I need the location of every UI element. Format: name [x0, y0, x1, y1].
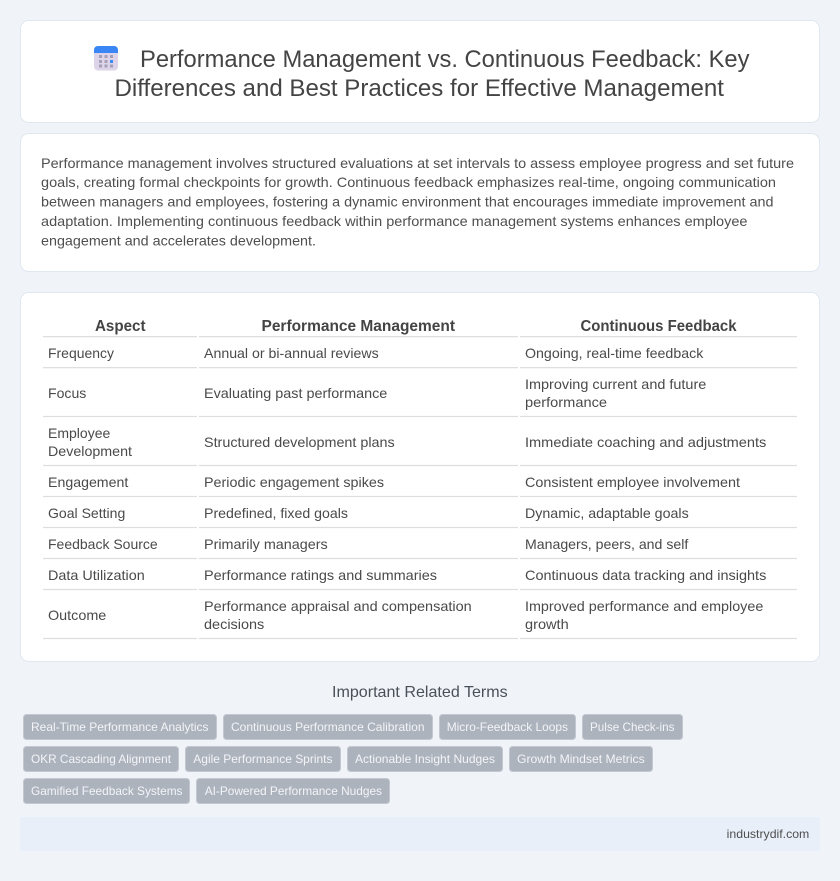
tag	[196, 778, 390, 804]
icon: calendar	[94, 46, 118, 70]
row: focus: performance	[525, 394, 607, 410]
row: data utilization	[48, 567, 766, 583]
table header row: Aspect	[95, 318, 146, 335]
row: outcome: growth	[525, 616, 569, 632]
row: employee development: Employee	[48, 425, 111, 441]
row: focus: Improving current and future	[525, 376, 707, 392]
row: outcome: Performance appraisal and compensation	[204, 598, 472, 614]
tag: AI-Powered Performance Nudges	[205, 784, 382, 798]
footer	[20, 817, 820, 851]
tag: Growth Mindset Metrics	[517, 752, 645, 766]
tag	[348, 746, 502, 772]
tag	[186, 746, 340, 772]
tag	[24, 746, 178, 772]
tag: Continuous Performance Calibration	[231, 720, 424, 734]
intro paragraph: adaptation. Implementing continuous feedback within performance management systems enhances employee	[41, 213, 748, 229]
row: feedback source	[48, 536, 688, 552]
intro paragraph	[41, 155, 794, 248]
tag: Micro-Feedback Loops	[447, 720, 568, 734]
row: employee development: Structured development plans	[204, 434, 395, 450]
tag	[440, 714, 576, 740]
row: engagement: Consistent employee involvement	[525, 474, 740, 490]
row: outcome: Outcome	[48, 607, 107, 623]
row: employee development: Development	[48, 443, 132, 459]
title: Performance Management vs. Continuous Feedback: Key	[140, 46, 750, 73]
row: focus: Evaluating past performance	[204, 385, 388, 401]
row: data utilization: Data Utilization	[48, 567, 145, 583]
tag group: related terms	[24, 714, 682, 804]
row: frequency	[48, 345, 704, 361]
row: feedback source: Primarily managers	[204, 536, 328, 552]
row: outcome: decisions	[204, 616, 264, 632]
tag: OKR Cascading Alignment	[31, 752, 172, 766]
footer: industrydif.com	[727, 827, 809, 841]
tag: Actionable Insight Nudges	[355, 752, 495, 766]
row: goal setting: Dynamic, adaptable goals	[525, 505, 689, 521]
row: feedback source: Managers, peers, and self	[525, 536, 688, 552]
row: engagement: Engagement	[48, 474, 128, 490]
row: employee development	[48, 425, 766, 459]
row: data utilization: Continuous data tracking and insights	[525, 567, 766, 583]
row: employee development: Immediate coaching and adjustments	[525, 434, 766, 450]
row: feedback source: Feedback Source	[48, 536, 158, 552]
intro paragraph: goals, creating formal checkpoints for growth. Continuous feedback emphasizes real-time, ongoing communication	[41, 174, 776, 190]
heading: important related terms: Important Related Terms	[332, 684, 508, 701]
row: frequency: Ongoing, real-time feedback	[525, 345, 704, 361]
table header row: Continuous Feedback	[580, 318, 737, 335]
row: engagement	[48, 474, 740, 490]
tag: Pulse Check-ins	[590, 720, 674, 734]
tag	[24, 714, 216, 740]
row: outcome: Improved performance and employee	[525, 598, 764, 614]
row: data utilization: Performance ratings and summaries	[204, 567, 437, 583]
table header row	[95, 318, 737, 335]
intro paragraph: Performance management involves structured evaluations at set intervals to assess employee progress and set future	[41, 155, 794, 171]
tag: Gamified Feedback Systems	[31, 784, 182, 798]
panel: comparison table	[20, 292, 820, 662]
row: goal setting: Predefined, fixed goals	[204, 505, 348, 521]
tag	[24, 778, 190, 804]
intro paragraph: engagement and accelerates development.	[41, 232, 316, 248]
tag	[510, 746, 652, 772]
row: engagement: Periodic engagement spikes	[204, 474, 384, 490]
panel: introduction	[20, 134, 820, 272]
tag: Real-Time Performance Analytics	[31, 720, 208, 734]
row: goal setting: Goal Setting	[48, 505, 125, 521]
row: outcome	[48, 598, 764, 632]
tag	[582, 714, 682, 740]
table header row: Performance Management	[262, 318, 456, 335]
row: focus: Focus	[48, 385, 86, 401]
panel: title header	[20, 20, 820, 122]
intro paragraph: between managers and employees, fostering a dynamic environment that encourages immediate improvement and	[41, 194, 774, 210]
title: Differences and Best Practices for Effective Management	[114, 75, 724, 102]
tag	[224, 714, 432, 740]
row: focus	[48, 376, 707, 410]
row: frequency: Annual or bi-annual reviews	[204, 345, 379, 361]
title	[114, 46, 750, 102]
tag: Agile Performance Sprints	[193, 752, 332, 766]
row: goal setting	[48, 505, 689, 521]
row: frequency: Frequency	[48, 345, 114, 361]
